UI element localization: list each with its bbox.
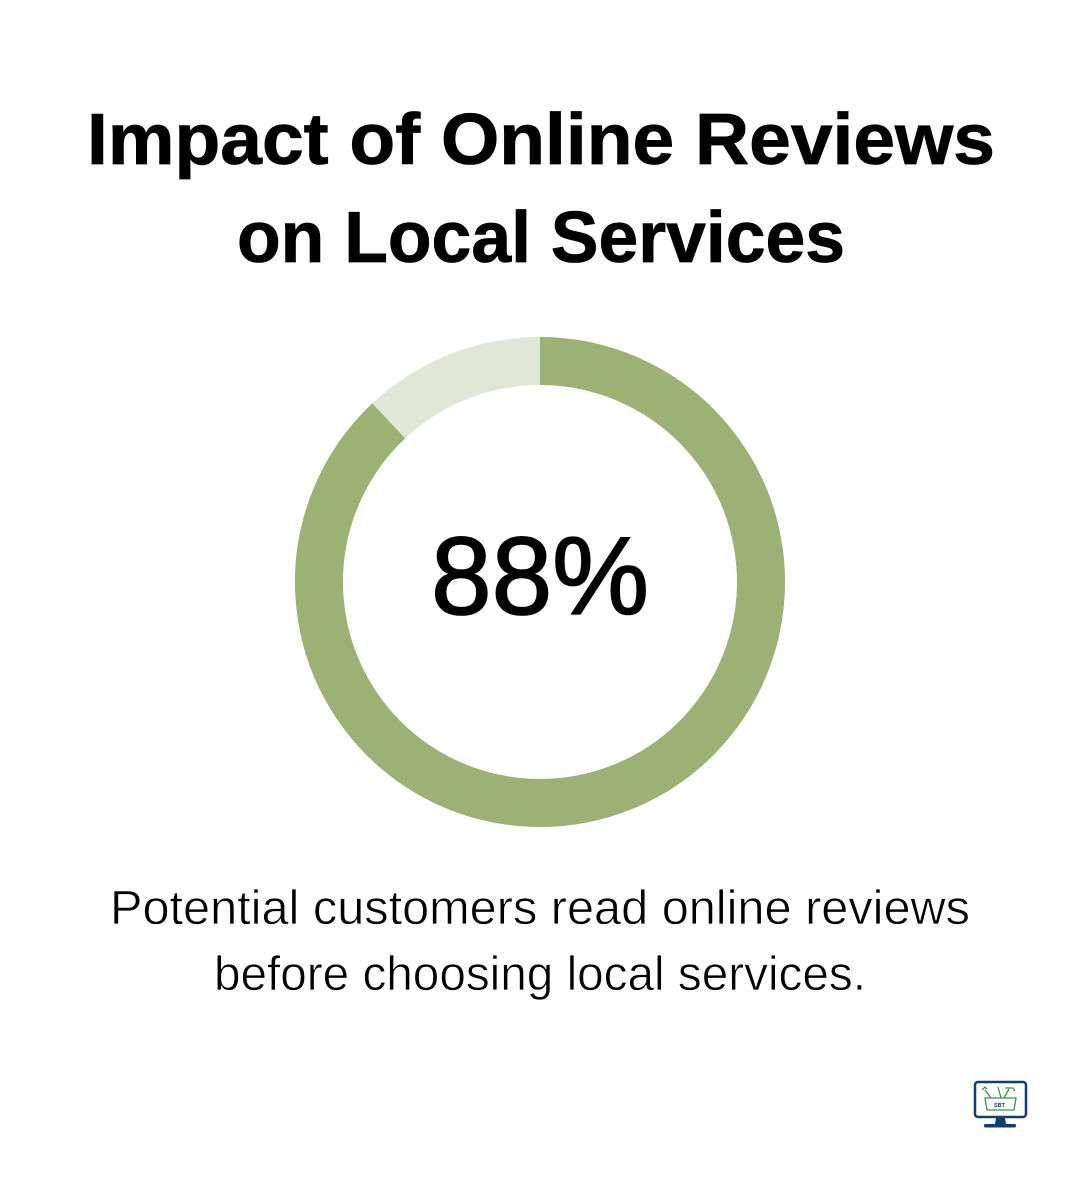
icon: SBT monitor toolbox logo: SBT (994, 1103, 1006, 1109)
description: Potential customers read online reviews (110, 882, 970, 935)
title: Impact of Online Reviews (87, 100, 995, 180)
description: before choosing local services. (214, 948, 866, 1001)
donut chart: 88% (319, 361, 761, 803)
icon: SBT monitor toolbox logo (975, 1082, 1026, 1128)
description (110, 882, 970, 1001)
title (87, 100, 995, 278)
title: on Local Services (237, 198, 845, 278)
donut value: 88% (431, 515, 649, 638)
